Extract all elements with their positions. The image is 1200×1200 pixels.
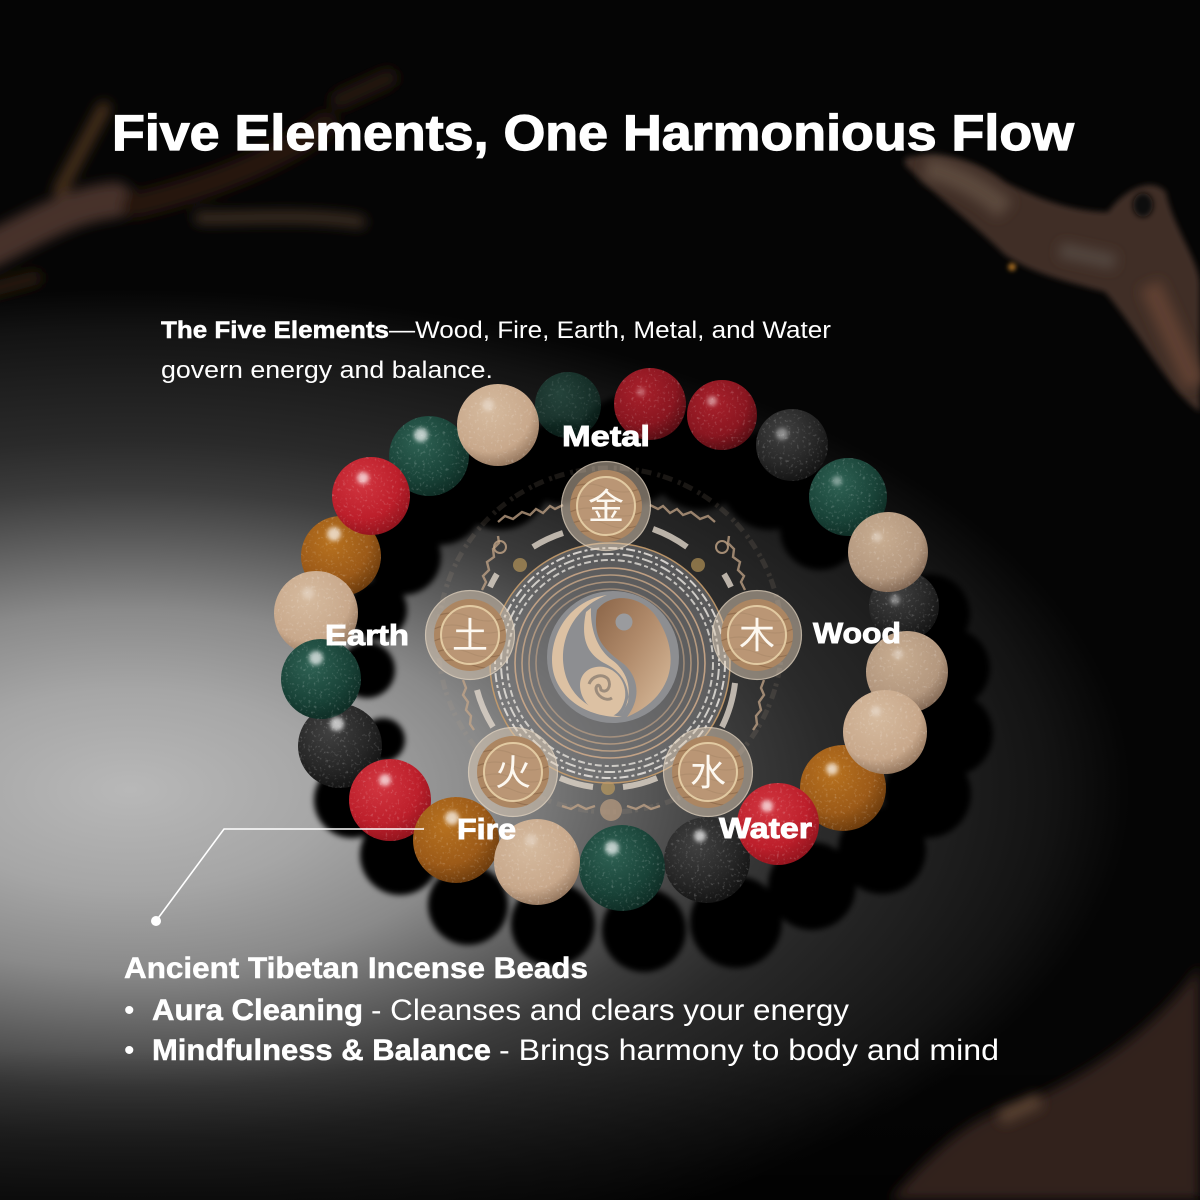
product benefits text: - Cleanses and clears your energy <box>371 994 849 1027</box>
label: Earth: Earth <box>325 620 409 652</box>
bead highlights <box>302 388 903 855</box>
branch: bottom right wood <box>890 965 1200 1200</box>
coin: wood: 木 <box>739 615 775 656</box>
product benefits text: • <box>124 994 135 1027</box>
coin: water: 水 <box>690 752 726 793</box>
product benefits text: Aura Cleaning <box>152 994 363 1027</box>
coin: metal: 金 <box>588 486 624 527</box>
product benefits text <box>124 952 999 1067</box>
label: Wood: Wood <box>813 618 901 650</box>
coin: earth <box>425 590 515 680</box>
intro text <box>161 317 831 384</box>
meander ring <box>490 543 730 783</box>
coin: wood <box>712 590 802 680</box>
product benefits text: - Brings harmony to body and mind <box>499 1034 999 1067</box>
branch: top right wood <box>905 155 1200 412</box>
branch: top left blurred wood <box>0 78 388 290</box>
product benefits text: • <box>124 1034 135 1067</box>
bracelet beads <box>274 368 948 911</box>
coin: metal <box>561 461 651 551</box>
inner zigzag ornaments <box>463 505 764 809</box>
coin: water <box>663 727 753 817</box>
coin: fire: 火 <box>495 752 531 793</box>
gold knots <box>513 558 705 795</box>
title: Five Elements, One Harmonious Flow <box>112 105 1074 161</box>
product benefits text: Ancient Tibetan Incense Beads <box>124 952 588 985</box>
bead shadows <box>314 395 993 972</box>
label: Fire: Fire <box>457 814 516 846</box>
intro text: —Wood, Fire, Earth, Metal, and Water <box>389 317 831 344</box>
label: Metal: Metal <box>562 421 650 453</box>
intro text: govern energy and balance. <box>161 357 493 384</box>
pentagon band <box>477 529 735 787</box>
yin yang <box>547 591 679 723</box>
coin: earth: 土 <box>452 615 488 656</box>
outer faint zigzag ring <box>438 468 782 812</box>
label: Water: Water <box>719 813 812 845</box>
callout leader line <box>151 829 424 926</box>
emblem: five elements mandala <box>425 461 802 821</box>
product benefits text: Mindfulness & Balance <box>152 1034 491 1067</box>
coin: fire <box>468 727 558 817</box>
intro text: The Five Elements <box>161 317 389 344</box>
